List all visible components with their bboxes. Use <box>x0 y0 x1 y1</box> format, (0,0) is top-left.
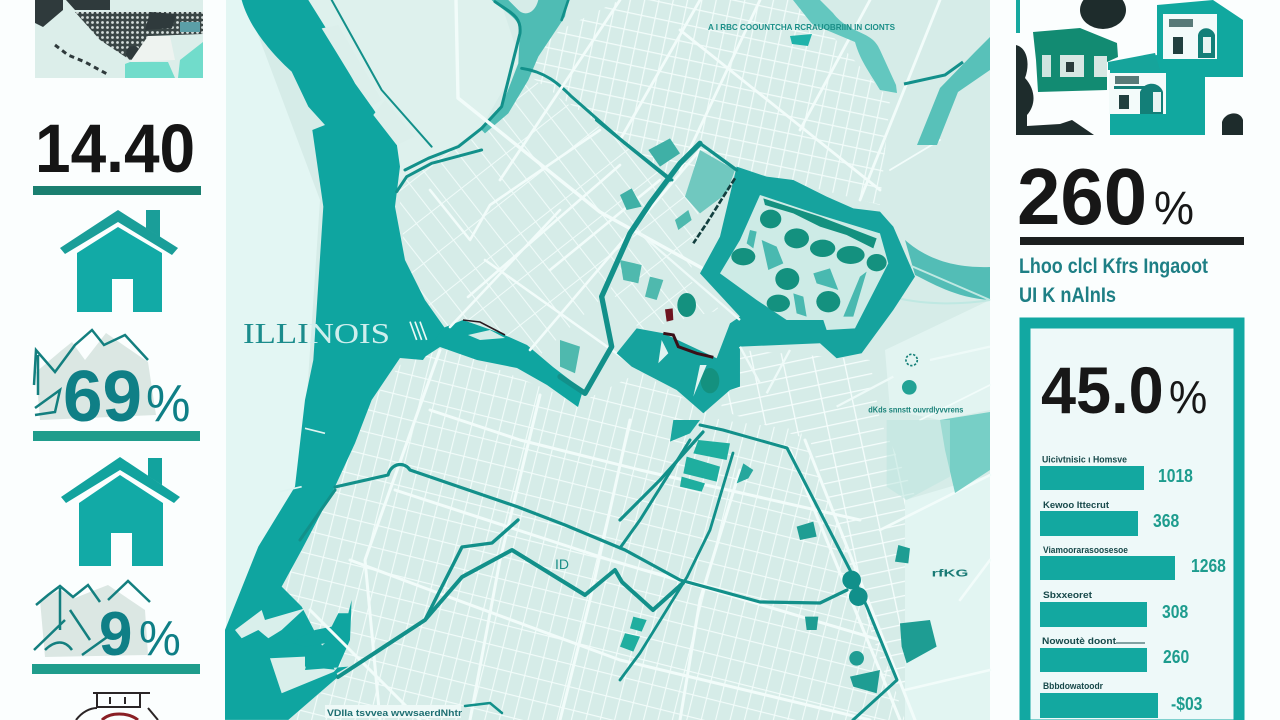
bar row 3: 1268 <box>1191 556 1226 576</box>
bar row 6: Bbbdowatoodr <box>1043 681 1103 691</box>
dark levee line <box>693 178 735 243</box>
bar row 1: 1018 <box>1158 466 1193 486</box>
west shore <box>226 0 320 640</box>
central land-use blocks <box>560 210 692 373</box>
main water body <box>225 0 482 720</box>
bar chart <box>1040 454 1226 718</box>
photo thumbnail <box>35 0 203 78</box>
panel: right statistics column <box>1016 0 1244 720</box>
southern connections <box>620 420 969 693</box>
small harbour piers <box>410 322 427 340</box>
pale inner park <box>720 195 888 330</box>
red marks <box>665 308 673 322</box>
fish-tank blocks <box>620 138 680 210</box>
north river <box>482 0 625 143</box>
icon and stat: 9%: 9 <box>99 599 132 668</box>
district streets <box>640 233 990 407</box>
light pools <box>747 230 867 317</box>
central fortress park <box>560 120 990 415</box>
illustration: houses <box>1016 0 1243 135</box>
icon: house <box>60 210 178 312</box>
map base land <box>226 0 990 720</box>
icon and stat: 69% <box>34 330 190 437</box>
description text: UI K nAlnIs <box>1019 284 1116 307</box>
southern connections: rfKG <box>932 569 969 580</box>
street texture: east strip <box>720 350 960 690</box>
teal houses <box>1110 0 1243 135</box>
description text: Lhoo clcl Kfrs Ingaoot <box>1019 255 1208 278</box>
lower-left islands <box>235 428 352 693</box>
south-east pale land <box>905 475 990 720</box>
stat: 260%: 260 <box>1017 152 1147 241</box>
spike <box>658 340 707 397</box>
icon: house <box>61 457 180 566</box>
thick route lines <box>300 143 897 720</box>
small harbour <box>397 128 482 192</box>
street texture: upper district <box>518 0 890 205</box>
stat rule <box>32 664 200 674</box>
icon and stat: 69%: % <box>146 374 190 432</box>
green lagoon band <box>617 167 915 413</box>
black shapes <box>1016 45 1094 135</box>
west levee <box>685 150 735 213</box>
panel: bar chart card <box>1025 323 1239 720</box>
street texture: southern district <box>282 345 905 720</box>
bar row 3 <box>1040 545 1226 580</box>
panel: left statistics column <box>32 0 203 720</box>
small round parks <box>902 354 917 395</box>
bar row 2 <box>1040 500 1179 536</box>
north small pond <box>790 34 812 46</box>
panel: map of Illinois <box>225 0 990 720</box>
stat rule <box>33 431 200 441</box>
river band <box>423 320 583 407</box>
stat rule <box>1020 237 1244 245</box>
icon and stat: 69%: 69 <box>63 356 142 437</box>
coastal pale blocks <box>322 25 415 145</box>
bar row 1: Uicivtnisic ι Homsve <box>1042 454 1127 464</box>
tree rows <box>677 198 887 393</box>
bar row 1 <box>1040 454 1193 490</box>
bar row 5 <box>1040 636 1189 672</box>
coast line <box>332 0 432 147</box>
bar row 2: 368 <box>1153 511 1179 531</box>
bar row 5: 260 <box>1163 647 1189 667</box>
main roads <box>310 0 990 720</box>
bar row 6 <box>1040 681 1202 718</box>
map label: north: A I RBC COOUNTCHA RCRAUOBRIIN IN CIONTS <box>708 22 895 32</box>
panel: bar chart card: % <box>1169 371 1207 423</box>
bar row 3: Viamoorarasoosesoe <box>1043 545 1128 555</box>
map label: Illinois: ILLI NOIS <box>243 319 390 350</box>
bar row 2: Kewoo Ittecrut <box>1043 500 1109 510</box>
bar row 6: -$03 <box>1171 694 1202 714</box>
description text <box>1019 255 1208 307</box>
map label: district: dKds snnstt ouvrdlyvvrens <box>868 406 964 415</box>
stat: 45.0%: 45.0 <box>1041 354 1164 427</box>
green house <box>1033 28 1118 92</box>
stat rule <box>33 186 201 195</box>
interchange nodes <box>842 571 861 589</box>
north pale land <box>308 0 520 180</box>
icon: small building <box>76 693 158 720</box>
map label: south: VDIIa tsvvea wvwsaerdNhtr <box>327 708 462 719</box>
bar row 4: 308 <box>1162 602 1188 622</box>
east pale land <box>885 300 990 420</box>
icon and stat: 9%: % <box>139 611 181 666</box>
bar row 5: Nowoutè doont <box>1042 636 1116 646</box>
stat: 14.40: 14.40 <box>35 111 195 188</box>
street texture: western district <box>398 70 670 355</box>
east river and bays <box>793 0 990 493</box>
stat: 260%: % <box>1154 181 1194 234</box>
street texture: central district <box>610 180 720 330</box>
bar row 4: Sbxxeoret <box>1043 590 1092 600</box>
north-west canal <box>560 143 700 393</box>
map label: ID: ID <box>555 556 569 572</box>
icon and stat: 9% <box>34 581 181 668</box>
bar row 4 <box>1040 590 1188 627</box>
